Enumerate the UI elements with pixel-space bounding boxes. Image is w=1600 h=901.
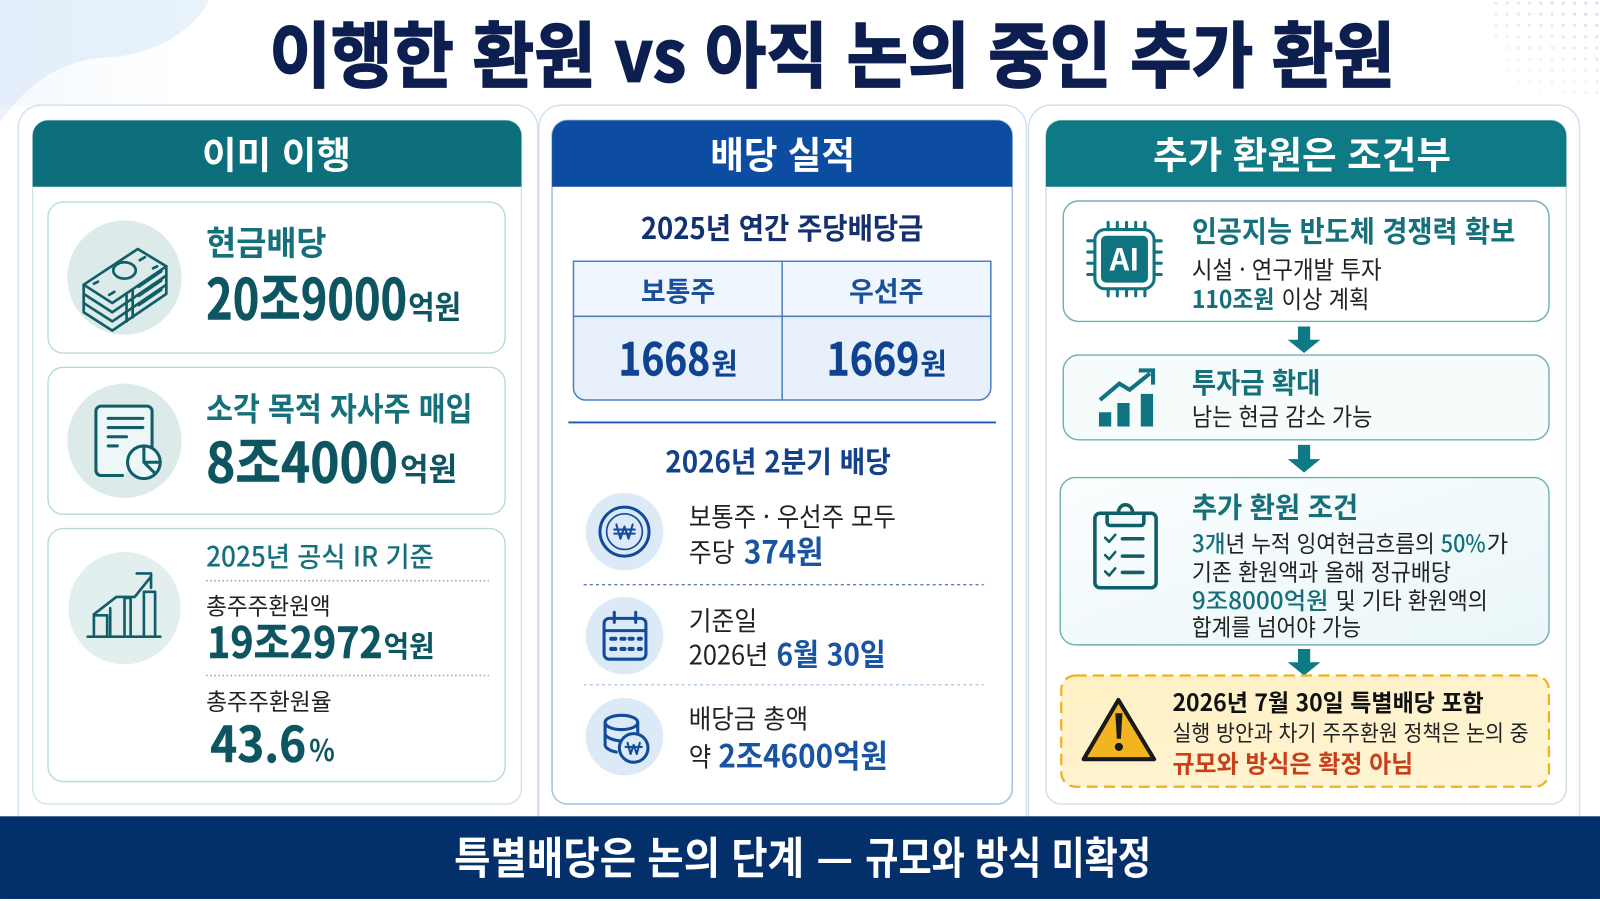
value: 19조2972억원: 19조2972 bbox=[207, 609, 383, 671]
card: AI chip competitiveness: 시설 · 연구개발 투자 bbox=[1192, 252, 1382, 287]
card: buyback bbox=[48, 367, 505, 514]
card: AI chip competitiveness: 이상 계획 bbox=[1282, 281, 1369, 316]
value: 20조9000억원: 억원 bbox=[408, 282, 461, 328]
card: additional return condition bbox=[1060, 478, 1549, 645]
row: record date: 6월 30일 bbox=[777, 629, 886, 674]
title: 이행한 환원 vs 아직 논의 중인 추가 환원 bbox=[269, 0, 1395, 103]
arrow: down 1 bbox=[1288, 327, 1320, 353]
label: total return amount: 총주주환원액 bbox=[206, 587, 331, 621]
callout: special dividend warning: 2026년 7월 30일 특별배당 포함 bbox=[1172, 684, 1484, 718]
value: 1669원: 원 bbox=[920, 340, 947, 383]
header: conditional: 추가 환원은 조건부 bbox=[1153, 124, 1451, 179]
value: 43.6%: 43.6 bbox=[210, 706, 306, 777]
row: total dividend: 2조4600억원 bbox=[718, 731, 888, 777]
value: 1669원: 1669 bbox=[827, 324, 919, 389]
callout: special dividend warning: 실행 방안과 차기 주주환원 정책은 논의 중 bbox=[1172, 716, 1529, 748]
icon: document with pie chart bbox=[96, 406, 160, 479]
value: 8조4000억원: 8조4000 bbox=[206, 419, 398, 499]
panel: already executed bbox=[33, 120, 521, 804]
header: already executed: 이미 이행 bbox=[202, 124, 351, 179]
panel: outer frame center bbox=[539, 105, 1027, 840]
label: buyback: 소각 목적 자사주 매입 bbox=[206, 383, 472, 430]
text: condition line 3: 및 기타 환원액의 bbox=[1336, 582, 1488, 616]
panel: dividend record bbox=[552, 120, 1012, 804]
text: condition line 1: 3개 bbox=[1192, 525, 1226, 559]
icon: clipboard checklist bbox=[1095, 505, 1156, 588]
heading: 2025 annual dividend: 2025년 연간 주당배당금 bbox=[641, 205, 923, 248]
label: IR basis: 2025년 공식 IR 기준 bbox=[206, 534, 434, 574]
row: record date bbox=[586, 597, 886, 674]
row: total dividend: 약 bbox=[689, 735, 711, 774]
label: cash dividend: 현금배당 bbox=[206, 216, 327, 265]
card: AI chip competitiveness: 인공지능 반도체 경쟁력 확보 bbox=[1192, 208, 1515, 251]
arrow: down 2 bbox=[1288, 445, 1320, 472]
footer banner: 특별배당은 논의 단계 bbox=[454, 822, 804, 886]
label: total return ratio: 총주주환원율 bbox=[206, 683, 332, 717]
row: per-share dividend: 보통주 · 우선주 모두 bbox=[689, 496, 896, 535]
text: condition line 3 bbox=[1192, 582, 1488, 616]
arrow: down 3 bbox=[1288, 649, 1320, 675]
value: 8조4000억원: 억원 bbox=[400, 445, 457, 491]
icon: AI chip bbox=[1088, 222, 1161, 296]
text: condition line 1: 50% bbox=[1441, 525, 1486, 559]
footer banner bbox=[0, 816, 1600, 899]
heading: Q2 2026 dividend: 2026년 2분기 배당 bbox=[665, 438, 891, 481]
icon: AI chip: AI bbox=[1109, 234, 1139, 279]
column head: common: 보통주 bbox=[641, 269, 715, 309]
icon: warning triangle bbox=[1084, 700, 1154, 759]
header: already executed bbox=[33, 120, 521, 187]
card: AI chip competitiveness: 110조원 bbox=[1192, 281, 1274, 316]
value: 20조9000억원: 20조9000 bbox=[206, 255, 407, 336]
background: top-right dot pattern bbox=[1494, 2, 1599, 94]
text: condition line 2: 기존 환원액과 올해 정규배당 bbox=[1192, 554, 1451, 588]
icon: money stack bbox=[84, 249, 166, 331]
text: condition line 3: 9조8000억원 bbox=[1192, 582, 1329, 616]
icon: calendar bbox=[604, 612, 646, 659]
text: condition line 4: 합계를 넘어야 가능 bbox=[1192, 609, 1361, 643]
icon: coin stack with won bbox=[605, 715, 648, 762]
panel: outer frame right bbox=[1029, 105, 1580, 840]
row: per-share dividend: 주당 bbox=[689, 531, 735, 570]
header: conditional bbox=[1046, 120, 1566, 187]
icon: growth bar chart bbox=[88, 573, 160, 637]
card: investment expansion: 투자금 확대 bbox=[1192, 361, 1320, 402]
row: record date: 기준일 bbox=[689, 600, 757, 639]
row: per-share dividend bbox=[586, 493, 896, 573]
callout: special dividend warning bbox=[1061, 675, 1549, 787]
row: total dividend: 배당금 총액 bbox=[689, 698, 808, 737]
background: top-left soft blob bbox=[0, 0, 209, 122]
header: dividend record bbox=[552, 120, 1012, 187]
callout: special dividend warning: 규모와 방식은 확정 아님 bbox=[1172, 745, 1413, 780]
column head: preferred: 우선주 bbox=[849, 269, 923, 309]
value: 1668원: 1668 bbox=[618, 324, 710, 389]
table: common vs preferred dividends bbox=[573, 261, 991, 400]
panel: additional return is conditional bbox=[1046, 120, 1566, 804]
card: investment expansion: 남는 현금 감소 가능 bbox=[1192, 399, 1372, 434]
footer banner: — bbox=[816, 822, 853, 886]
value: 19조2972억원: 억원 bbox=[384, 623, 435, 666]
row: total dividend bbox=[586, 698, 888, 777]
row: per-share dividend: 374원 bbox=[744, 527, 823, 573]
panel: outer frame left bbox=[18, 105, 538, 840]
text: condition line 1: 년 누적 잉여현금흐름의 bbox=[1226, 525, 1435, 559]
card: cash dividend bbox=[48, 202, 505, 353]
card: IR figures bbox=[48, 529, 505, 782]
value: 43.6%: % bbox=[309, 727, 335, 770]
card: AI chip competitiveness bbox=[1063, 201, 1549, 321]
text: condition line 1: 가 bbox=[1487, 525, 1508, 559]
row: record date: 2026년 bbox=[689, 633, 768, 672]
header: dividend record: 배당 실적 bbox=[710, 124, 855, 179]
value: 1668원: 원 bbox=[711, 340, 738, 383]
footer banner: 규모와 방식 미확정 bbox=[865, 822, 1151, 886]
card: investment expansion bbox=[1063, 355, 1549, 440]
icon: won coin bbox=[600, 507, 649, 556]
icon: growth bars bbox=[1099, 370, 1153, 427]
card: additional return condition: 추가 환원 조건 bbox=[1192, 485, 1358, 526]
